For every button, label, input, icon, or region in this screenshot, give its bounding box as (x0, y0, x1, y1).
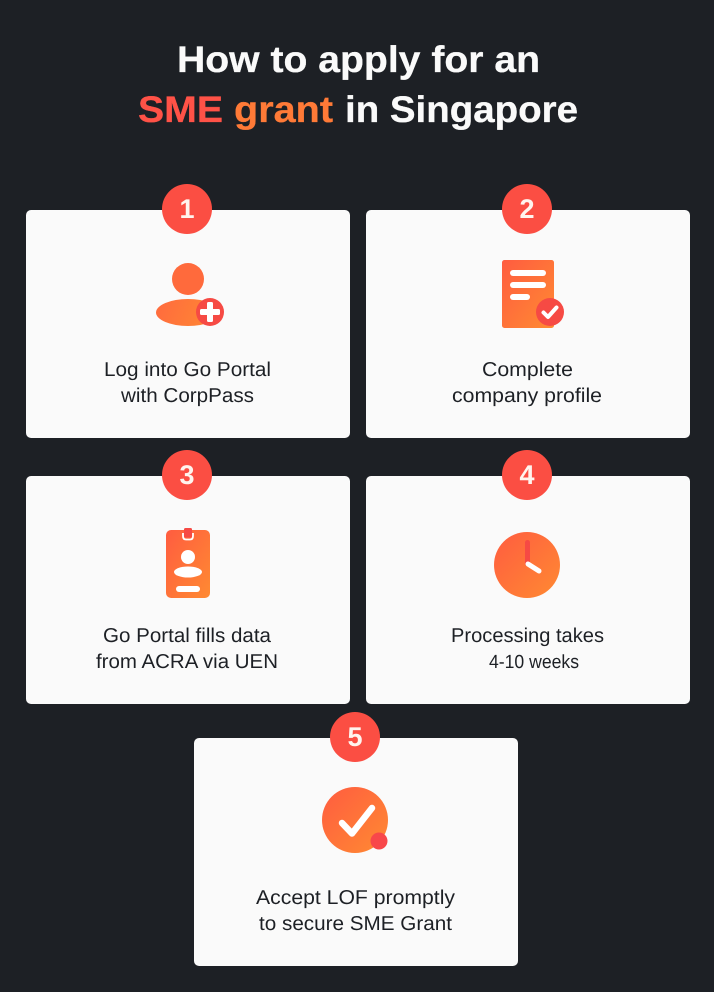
icon: check circle (322, 787, 388, 853)
step 3 number badge: 3 (179, 460, 195, 490)
step 4 text: 4-10 weeks (489, 652, 579, 673)
step 5 text (256, 887, 455, 935)
step 3 text (96, 625, 278, 673)
step 2 text (452, 359, 602, 407)
icon: person with plus (156, 263, 224, 326)
step 1 number badge: 1 (179, 194, 195, 224)
title (138, 39, 578, 130)
step 2 text: Complete (482, 359, 573, 381)
step 5 text: to secure SME Grant (259, 913, 452, 935)
title: SME (138, 89, 223, 130)
title: How to apply for an (177, 39, 540, 80)
step 4 number badge: 4 (519, 460, 535, 490)
panel: step 1 (26, 184, 350, 438)
step 5 text: Accept LOF promptly (256, 887, 455, 909)
title: in Singapore (345, 89, 578, 130)
step 1 text (104, 359, 271, 407)
step 2 text: company profile (452, 385, 602, 407)
step 4 number badge (502, 450, 552, 500)
step 1 text: with CorpPass (120, 385, 254, 407)
panel: step 2 (366, 184, 690, 438)
step 3 text: from ACRA via UEN (96, 651, 278, 673)
step 3 number badge (162, 450, 212, 500)
step 2 number badge: 2 (519, 194, 535, 224)
title: grant (234, 89, 333, 130)
step 1 number badge (162, 184, 212, 234)
icon: ID badge (166, 528, 210, 598)
icon: clock (494, 532, 560, 598)
icon: document with check (502, 260, 564, 328)
step 4 text (451, 625, 604, 673)
step 2 number badge (502, 184, 552, 234)
panel: step 3 (26, 450, 350, 704)
step 3 text: Go Portal fills data (103, 625, 272, 647)
step 1 text: Log into Go Portal (104, 359, 271, 381)
step 5 number badge: 5 (347, 722, 363, 752)
step 5 number badge (330, 712, 380, 762)
panel: step 5 (194, 712, 518, 966)
panel: step 4 (366, 450, 690, 704)
step 4 text: Processing takes (451, 625, 604, 647)
